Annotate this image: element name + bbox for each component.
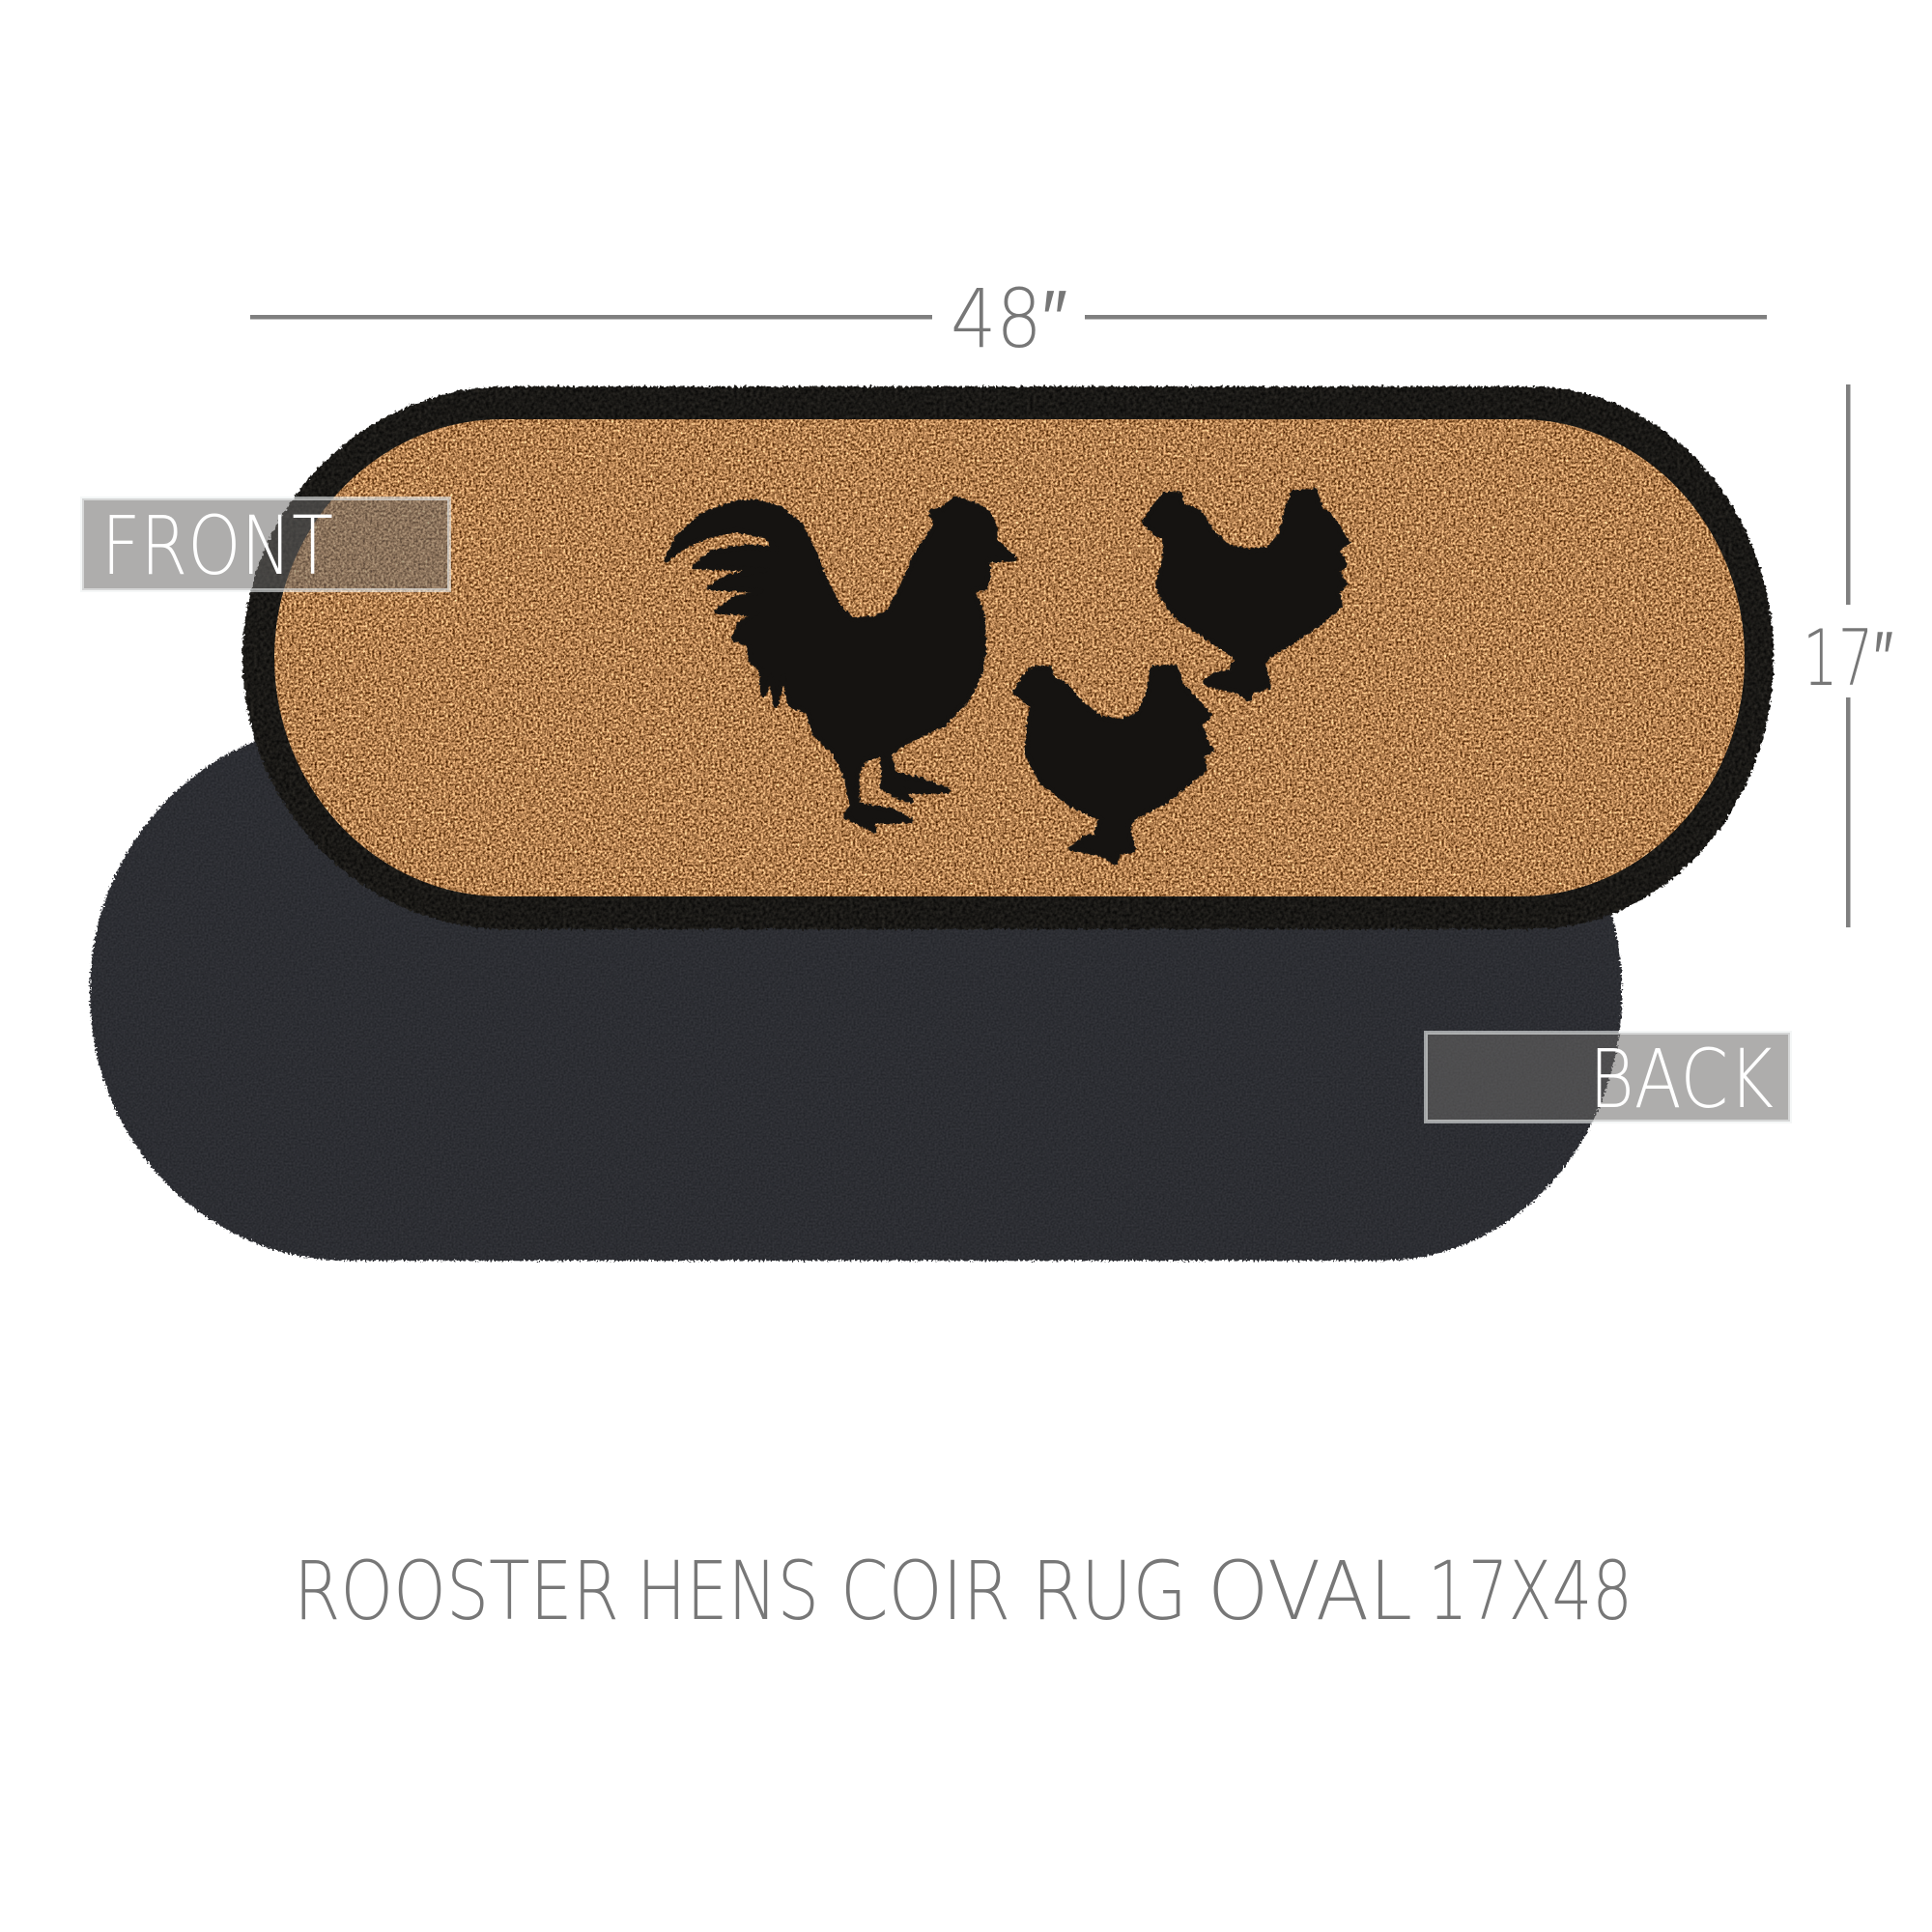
height dimension: 17 inches	[1803, 384, 1893, 927]
icon: rooster silhouette	[667, 499, 1015, 831]
rug black border	[242, 386, 1774, 929]
title: OVAL	[1208, 1544, 1412, 1638]
label: BACK	[1426, 1032, 1790, 1126]
width dimension: 48 inches	[250, 271, 1767, 366]
title: HENS	[637, 1544, 819, 1638]
title: RUG	[1032, 1544, 1187, 1638]
title: 17X48	[1428, 1544, 1633, 1638]
icon: lower hen silhouette	[1015, 667, 1212, 863]
back of rug	[90, 724, 1622, 1261]
height dimension: 17 inches: 17″	[1803, 613, 1893, 703]
front of rug	[242, 386, 1774, 929]
title: COIR	[840, 1544, 1010, 1638]
width dimension: 48 inches: 48″	[951, 271, 1067, 366]
rug coir field	[274, 419, 1745, 896]
label: BACK: BACK	[1589, 1032, 1774, 1126]
title	[294, 1544, 1633, 1638]
title: ROOSTER	[294, 1544, 619, 1638]
label: FRONT: FRONT	[101, 498, 333, 593]
icon: upper hen silhouette	[1145, 491, 1348, 698]
